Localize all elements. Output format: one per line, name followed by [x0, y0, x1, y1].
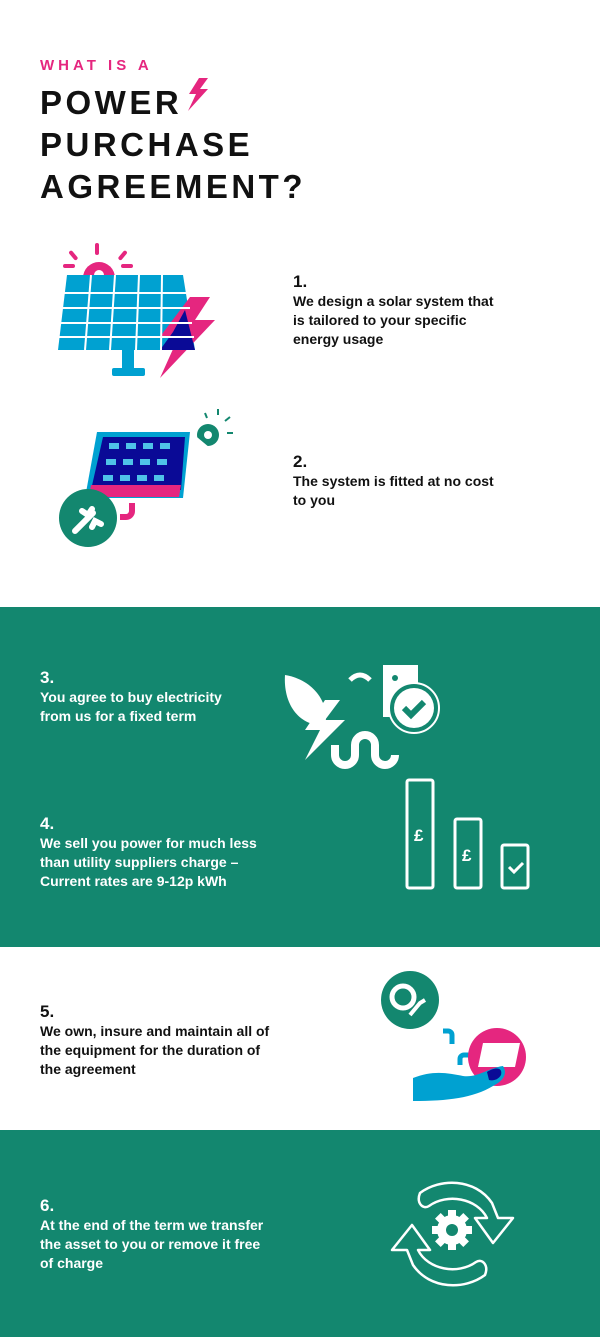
title: PURCHASE: [40, 126, 253, 163]
chart: price bars: [406, 778, 530, 890]
text: step 3: [40, 668, 222, 724]
icon: panel fitting: [59, 409, 233, 547]
text: step 5: [40, 1002, 270, 1077]
panel: green band 3-4: [0, 607, 600, 947]
text: step 4: We sell you power for much less: [40, 835, 257, 851]
icon: solar panel with bolt: [58, 243, 215, 378]
icon: hand with equipment: [381, 971, 526, 1101]
chart: price bars: £: [462, 846, 472, 865]
text: step 1: [293, 272, 494, 347]
text: step 3: 3.: [40, 668, 54, 687]
panel: green band 6: [0, 1130, 600, 1337]
text: step 1: We design a solar system that: [293, 293, 493, 309]
text: step 1: 1.: [293, 272, 307, 291]
text: step 4: Current rates are 9-12p kWh: [40, 873, 227, 889]
text: step 2: [293, 452, 494, 508]
text: step 6: of charge: [40, 1255, 103, 1271]
text: step 6: 6.: [40, 1196, 54, 1215]
text: step 1: energy usage: [293, 331, 383, 347]
text: step 4: 4.: [40, 814, 54, 833]
text: step 5: the agreement: [40, 1061, 136, 1077]
title: WHAT IS A: [40, 57, 153, 74]
text: step 2: to you: [293, 492, 335, 508]
text: step 4: [40, 814, 257, 889]
text: step 2: 2.: [293, 452, 307, 471]
chart: price bars: £: [414, 826, 424, 845]
text: step 6: At the end of the term we transfer: [40, 1217, 263, 1233]
text: step 1: is tailored to your specific: [293, 312, 466, 328]
title: POWER: [40, 84, 182, 121]
title: AGREEMENT?: [40, 168, 306, 205]
text: step 5: 5.: [40, 1002, 54, 1021]
text: step 6: the asset to you or remove it free: [40, 1236, 260, 1252]
text: step 3: You agree to buy electricity: [40, 689, 222, 705]
icon: cycle arrows with gear: [390, 1182, 514, 1286]
text: step 2: The system is fitted at no cost: [293, 473, 494, 489]
text: step 3: from us for a fixed term: [40, 708, 196, 724]
text: step 5: the equipment for the duration of: [40, 1042, 260, 1058]
text: step 6: [40, 1196, 263, 1271]
text: step 5: We own, insure and maintain all of: [40, 1023, 269, 1039]
title: [40, 57, 306, 205]
text: step 4: than utility suppliers charge –: [40, 854, 238, 870]
icon: leaf bolt and contract: [284, 665, 440, 769]
